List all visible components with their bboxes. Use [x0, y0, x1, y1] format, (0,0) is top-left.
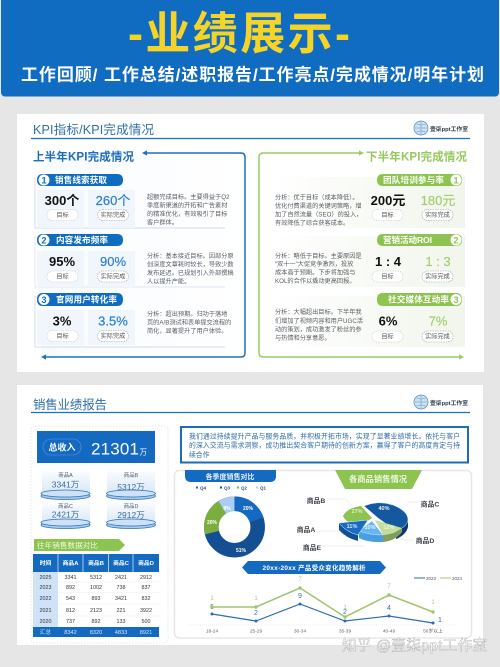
pie name labels: 商品E: [303, 543, 322, 552]
legend: quarters: [196, 486, 267, 490]
series 2023: 4: [387, 605, 391, 612]
target metric: [37, 310, 84, 345]
tab: quarterly: 各季度销售对比: [206, 472, 254, 481]
row 3: social: [271, 293, 465, 347]
pie slices: [339, 503, 408, 542]
target metric: 目标: [56, 211, 69, 219]
data table: 2021: [40, 608, 52, 614]
data table: 2025: [40, 575, 52, 581]
data table: 738: [116, 585, 126, 591]
target metric: 目标: [381, 332, 394, 340]
row 2: ROI: [271, 234, 465, 287]
analysis text: 发布延迟。已规划引入外部撰稿: [147, 269, 234, 277]
data table: 5312: [90, 575, 102, 581]
total revenue: 21301: [91, 440, 139, 458]
series 2023: [210, 593, 442, 624]
analysis text: [275, 252, 362, 285]
actual metric: 7%: [429, 314, 448, 328]
series 2024: 1: [254, 596, 258, 602]
target metric: 200元: [371, 193, 405, 208]
product D: 2912万: [117, 510, 145, 520]
pill: training: [377, 174, 462, 186]
logo: sales panel: [414, 395, 468, 409]
target metric: [372, 314, 403, 342]
data table: 时间: [40, 559, 51, 567]
product D: 商品D: [124, 502, 138, 510]
product C: 商品C: [58, 502, 73, 510]
actual metric: [88, 190, 135, 228]
banner: trend title: 20xx-20xx 产品受众变化趋势解析: [262, 563, 366, 572]
product B: 商品B: [124, 471, 139, 479]
arrow: blue frame: [41, 150, 245, 360]
analysis text: 分析：基本接近目标。因部分原: [147, 252, 234, 260]
series 2024: 1: [343, 605, 347, 611]
row 2: content frequency: [35, 234, 234, 287]
banner: trend title: [242, 561, 386, 574]
data table: 2020: [40, 619, 52, 625]
data table: 892: [66, 585, 75, 591]
actual metric: 实际完成: [425, 332, 450, 340]
target metric: [372, 254, 403, 282]
analysis text: 加了自然流量（SEO）的投入，: [275, 210, 362, 218]
data table: [33, 554, 159, 637]
legend: quarters: Q4: [200, 486, 207, 490]
pie percent labels: 12%: [383, 525, 395, 531]
series 2024: 7: [387, 584, 391, 590]
analysis text: 们增加了视频内容和用户UGC活: [275, 317, 363, 325]
data table: 商品A: [63, 559, 79, 567]
green tag: historical data: [34, 539, 125, 551]
legend: quarters: Q1: [260, 486, 267, 490]
legend: years: 2023: [426, 576, 437, 581]
data table: 221: [116, 608, 126, 614]
actual metric: [422, 314, 453, 342]
data table: 2912: [140, 575, 152, 581]
target metric: 95%: [49, 254, 75, 269]
donut labels: 20%: [243, 506, 254, 512]
data table: 商品D: [138, 559, 154, 567]
data table: 商品C: [113, 559, 130, 567]
pie percent labels: 11%: [347, 524, 357, 530]
3D pie chart: product sales: [297, 470, 439, 552]
panel: sales report: [17, 385, 483, 645]
total revenue: 总收入: [48, 442, 76, 452]
target metric: 目标: [56, 332, 69, 340]
product A: 3341万: [52, 480, 79, 490]
pill: leads: 1: [41, 176, 47, 186]
target metric: 6%: [379, 314, 398, 328]
target metric: 目标: [381, 272, 394, 280]
x axis labels: 25-29: [250, 628, 262, 634]
pill: training: 团队培训参与率: [383, 174, 444, 185]
leader lines: [317, 499, 420, 546]
legend: quarters: Q2: [241, 486, 248, 490]
pie name labels: 商品A: [297, 525, 315, 534]
analysis text: 人以提升产能。: [147, 278, 190, 286]
KPI panel heading: KPI指标/KPI完成情况: [33, 122, 154, 137]
product C: 2421万: [52, 510, 79, 520]
target metric: 目标: [56, 272, 69, 280]
data table: 8921: [140, 630, 152, 636]
data table: 3421: [115, 596, 127, 602]
product B: 5312万: [117, 482, 145, 492]
analysis text: [147, 252, 234, 286]
total revenue: [37, 431, 155, 463]
pill: leads: 销售线索获取: [55, 174, 107, 185]
pie percent labels: 40%: [378, 506, 390, 512]
analysis text: 成本高于预期。下步将加强与: [275, 268, 355, 276]
data table: 3341: [64, 575, 76, 581]
panel: KPI: [17, 114, 484, 372]
data table: 737: [66, 619, 75, 625]
pill: social: 社交媒体互动率: [388, 294, 449, 304]
subtitle: 工作回顾/ 工作总结/述职报告/工作亮点/完成情况/明年计划: [21, 64, 484, 84]
x axis labels: 18-24: [206, 628, 218, 634]
data table: 893: [92, 596, 100, 602]
series 2024: [210, 577, 435, 619]
series 2023: 2: [254, 610, 258, 617]
analysis text: 简化，显著提升了用户体验。: [147, 327, 227, 335]
pill: content: 2: [41, 236, 47, 246]
pie name labels: [297, 496, 439, 552]
actual metric: [422, 254, 453, 282]
series 2023: 1: [438, 617, 442, 624]
row 1: training: [271, 174, 465, 228]
panel: second half: [259, 150, 468, 360]
panel: revenue and table: [31, 426, 168, 643]
line chart: audience trend: [188, 561, 463, 634]
data table: 812: [66, 608, 75, 614]
legend: years: 2024: [452, 576, 463, 581]
summary callout: 的深入交流与需求洞察，成功推出契合客户期待的创新方案，赢得了客户的高度肯定与持: [189, 440, 460, 450]
donut labels: [207, 506, 254, 554]
pie name labels: 商品C: [421, 500, 439, 508]
actual metric: 实际完成: [101, 332, 125, 340]
analysis text: 分析：优于目标（成本降低）。: [275, 194, 359, 202]
analysis text: 分析：超出预期。归功于落地: [147, 310, 227, 318]
product A: 商品A: [58, 471, 73, 479]
x axis labels: 35-39: [339, 628, 351, 634]
summary callout: 我们通过持续提升产品与服务品质，并积极开拓市场，实现了显著业绩增长。依托与客户: [189, 432, 460, 440]
data table: 2022: [40, 596, 52, 602]
x axis labels: 40-49: [383, 628, 395, 634]
x axis labels: 30-34: [294, 628, 306, 634]
pie name labels: 商品D: [416, 536, 434, 545]
heading: second half: 下半年KPI完成情况: [366, 150, 468, 164]
product B: [106, 468, 156, 500]
x axis labels: [206, 628, 443, 634]
logo: KPI panel: 壹柒ppt工作室: [430, 125, 468, 133]
analysis text: 页的A/B测试和表单提交流程的: [147, 318, 231, 326]
data table: 2421: [115, 575, 127, 581]
donut labels: 8%: [223, 506, 231, 512]
data table: 8342: [64, 630, 77, 636]
analysis text: [147, 193, 230, 226]
target metric: 目标: [381, 211, 394, 219]
series 2024: 1: [210, 596, 214, 602]
analysis text: 动的策划，成功激发了粉丝的参: [275, 326, 362, 334]
data table: 8320: [90, 630, 102, 636]
data table: 4833: [115, 630, 127, 636]
sales report heading: 销售业绩报告: [33, 397, 107, 412]
target metric: 3%: [53, 314, 72, 328]
analysis text: 创深度文章耗时较长，导致少数: [147, 260, 234, 268]
data table: 3922: [140, 608, 152, 614]
pill: social: 3: [453, 295, 459, 305]
analysis text: 超额完成目标。主要得益于Q2: [147, 193, 230, 201]
logo: sales panel: 壹柒ppt工作室: [430, 399, 468, 407]
donut chart: quarterly sales: [185, 470, 276, 559]
actual metric: 3.5%: [98, 314, 128, 328]
analysis text: 的精准优化，有效吸引了目标: [147, 210, 227, 218]
legend: years: [414, 576, 463, 581]
pill: conversion: 官网用户转化率: [56, 294, 117, 304]
target metric: [371, 193, 405, 220]
product C: [41, 500, 90, 528]
data table: 商品B: [88, 559, 104, 567]
analysis text: 优化付费渠道的关键词策略，增: [275, 202, 362, 210]
header banner: [1, 0, 499, 96]
total revenue: 万: [140, 448, 148, 456]
data table: 837: [142, 585, 150, 591]
arrow: green frame: [259, 150, 464, 360]
actual metric: 实际完成: [425, 272, 450, 280]
donut rings: [203, 495, 266, 559]
pill: leads: [37, 174, 123, 186]
target metric: 1 : 4: [375, 254, 402, 269]
actual metric: 90%: [100, 254, 126, 269]
target metric: 300个: [45, 193, 79, 208]
actual metric: [421, 193, 455, 220]
series 2023: 2: [343, 609, 347, 616]
watermark: 知乎 @壹柒ppt工作室: [342, 638, 487, 654]
actual metric: 实际完成: [425, 211, 450, 219]
pill: ROI: 营销活动ROI: [383, 234, 432, 245]
series 2023: 9: [298, 593, 302, 600]
data table: 2023: [40, 585, 52, 591]
row 1: leads: [35, 174, 230, 228]
analysis text: [275, 194, 362, 227]
pie name labels: 商品B: [307, 496, 325, 505]
analysis text: [275, 308, 363, 342]
pill: content: [37, 234, 123, 246]
data table: 133: [116, 619, 126, 625]
analysis text: “双十一”大促竞争激烈，投放: [275, 260, 353, 268]
actual metric: 实际完成: [101, 272, 125, 280]
pie percent labels: 10%: [364, 525, 376, 531]
x axis labels: 50岁以上: [423, 628, 443, 634]
target metric: [37, 190, 84, 228]
analysis text: [147, 310, 231, 335]
donut labels: 51%: [236, 548, 247, 554]
product A: [41, 468, 90, 500]
data table: 543: [66, 596, 75, 602]
analysis text: KOL的合作以撬动更高回报。: [275, 277, 355, 285]
analysis text: 季度新渠道的开拓和广告素材: [147, 202, 227, 210]
data table: 892: [92, 619, 100, 625]
row 3: conversion: [35, 293, 231, 347]
pill: ROI: [377, 234, 462, 246]
legend: quarters: Q3: [224, 486, 231, 490]
panel: charts: [174, 470, 472, 638]
pill: training: 1: [453, 176, 459, 186]
analysis text: 有效降低了综合获客成本。: [275, 219, 349, 227]
actual metric: 实际完成: [101, 211, 125, 219]
summary callout: [181, 427, 468, 462]
heading: first half: 上半年KPI完成情况: [33, 150, 134, 164]
tab: products: [335, 470, 422, 489]
series 2023: 6: [210, 604, 214, 611]
data table: 1002: [90, 585, 102, 591]
pie percent labels: 27%: [351, 509, 363, 515]
product D: [106, 500, 156, 528]
actual metric: 180元: [421, 193, 455, 208]
panel: first half: [33, 150, 245, 360]
data table: 2123: [90, 608, 102, 614]
pill: social: [377, 293, 462, 306]
actual metric: 1 : 3: [425, 254, 451, 269]
tab: products: 各商品销售情况: [349, 474, 408, 484]
data table: 500: [142, 619, 150, 625]
data table: 汇总: [40, 628, 51, 636]
analysis text: 客户群体。: [147, 218, 178, 226]
actual metric: [88, 251, 135, 287]
green tag: historical data: 往年销售数据对比: [37, 540, 98, 550]
analysis text: 分析：略低于目标。主要原因是: [275, 252, 362, 260]
pill: ROI: 2: [453, 236, 459, 246]
actual metric: [88, 310, 135, 345]
donut labels: 20%: [207, 520, 218, 526]
actual metric: 260个: [96, 193, 130, 208]
pill: conversion: 3: [41, 295, 47, 305]
logo: KPI panel: [414, 121, 468, 135]
pill: content: 内容发布频率: [56, 234, 108, 245]
target metric: [37, 251, 84, 287]
pie percent labels: [347, 506, 395, 531]
series 2024: 1: [431, 600, 435, 606]
title: -业绩展示-: [128, 8, 350, 59]
series 2024: 7: [298, 577, 302, 583]
data table: 832: [142, 596, 150, 602]
analysis text: 分析：大幅超出目标。下半年我: [275, 308, 362, 316]
analysis text: 与热情和分享意愿。: [275, 334, 331, 342]
summary callout: 续合作: [189, 450, 210, 459]
pill: conversion: [37, 293, 123, 306]
